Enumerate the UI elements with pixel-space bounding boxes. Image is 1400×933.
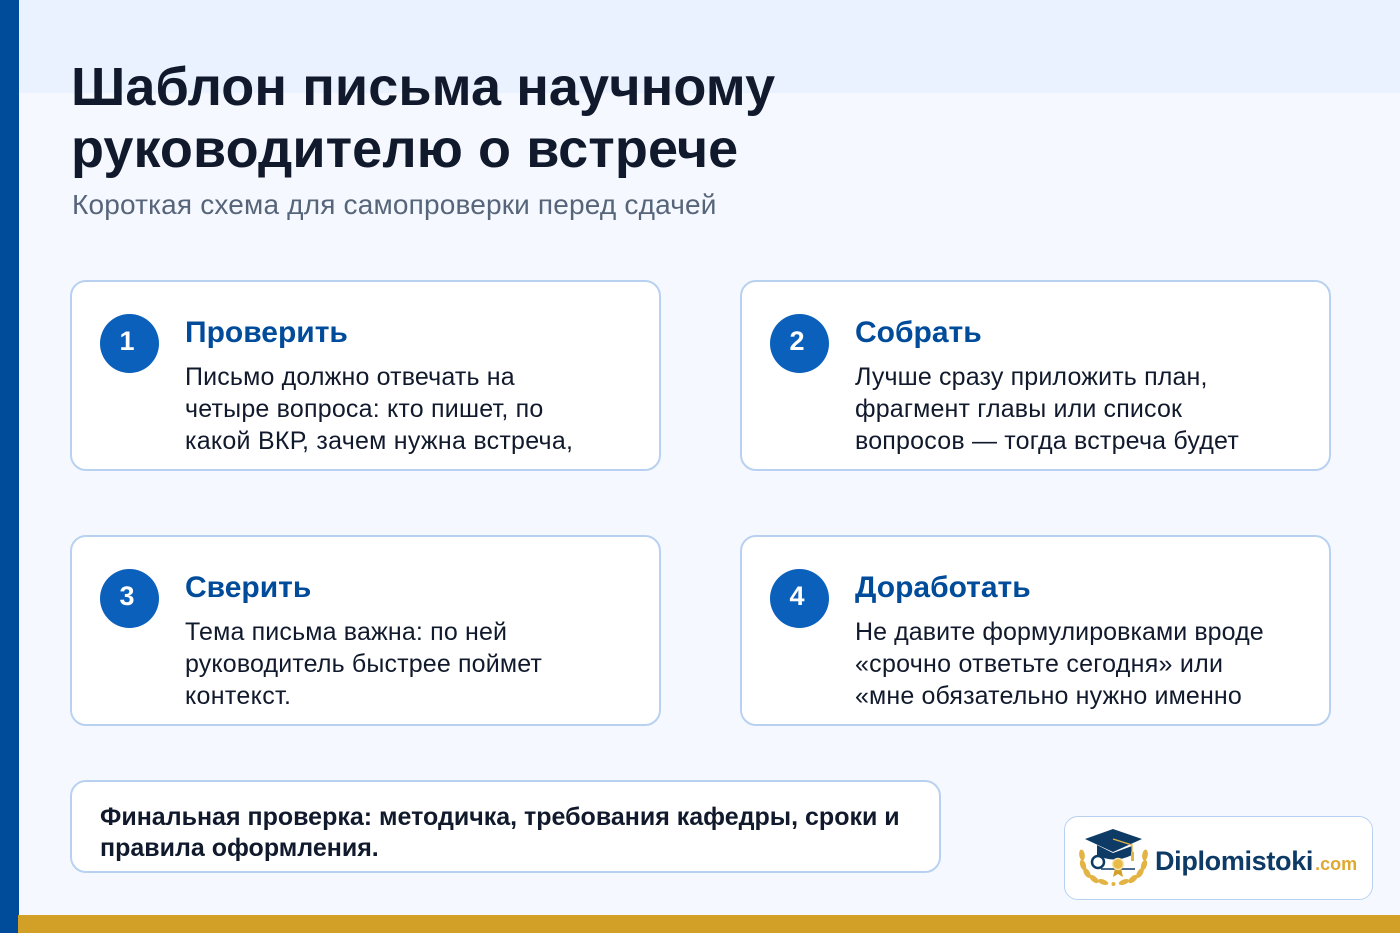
text: step 2 (855, 363, 1239, 455)
text: step 1: четыре вопроса: кто пишет, по (185, 395, 544, 423)
text: step 3: Тема письма важна: по ней (185, 618, 507, 646)
heading: Сверить: Сверить (185, 571, 311, 604)
text: step 2: вопросов — тогда встреча будет (855, 427, 1239, 455)
number 2 (770, 314, 829, 373)
number 3 (100, 569, 159, 628)
title: руководителю о встрече (71, 119, 738, 179)
bottom bar (18, 915, 1400, 933)
left bar (0, 0, 19, 933)
heading: Проверить: Проверить (185, 316, 348, 349)
number 2: 2 (789, 326, 805, 356)
text: step 2: Лучше сразу приложить план, (855, 363, 1208, 391)
number 4: 4 (789, 581, 805, 611)
text: step 3: контекст. (185, 682, 291, 710)
text: step 4: «срочно ответьте сегодня» или (855, 650, 1223, 678)
text: final check: Финальная проверка: методичка, требования кафедры, сроки и (100, 803, 900, 831)
text: step 3 (185, 618, 542, 710)
top band (18, 0, 1400, 93)
number 4 (770, 569, 829, 628)
panel: step 3 (70, 535, 661, 726)
number 1: 1 (119, 326, 135, 356)
panel: step 2 (740, 280, 1331, 471)
number 3: 3 (119, 581, 135, 611)
heading: Доработать: Доработать (855, 571, 1031, 604)
text: step 1: какой ВКР, зачем нужна встреча, (185, 427, 573, 455)
text: step 2: фрагмент главы или список (855, 395, 1182, 423)
text: step 4: Не давите формулировками вроде (855, 618, 1264, 646)
text: final check: правила оформления. (100, 834, 379, 862)
text: final check (100, 803, 900, 862)
logo wordmark: Diplomistoki.com (1155, 846, 1357, 876)
heading: Собрать: Собрать (855, 316, 982, 349)
panel: step 1 (70, 280, 661, 471)
text: step 1 (185, 363, 573, 455)
text: step 3: руководитель быстрее поймет (185, 650, 542, 678)
title: Шаблон письма научному (71, 57, 775, 117)
subtitle: Короткая схема для самопроверки перед сдачей (72, 189, 717, 220)
text: step 4 (855, 618, 1264, 710)
number 1 (100, 314, 159, 373)
text: step 1: Письмо должно отвечать на (185, 363, 515, 391)
text: step 4: «мне обязательно нужно именно (855, 682, 1242, 710)
icon: graduation cap with laurel (1079, 829, 1148, 886)
panel: step 4 (740, 535, 1331, 726)
panel: final check (70, 780, 941, 873)
title (71, 57, 775, 179)
logo panel (1064, 816, 1373, 900)
